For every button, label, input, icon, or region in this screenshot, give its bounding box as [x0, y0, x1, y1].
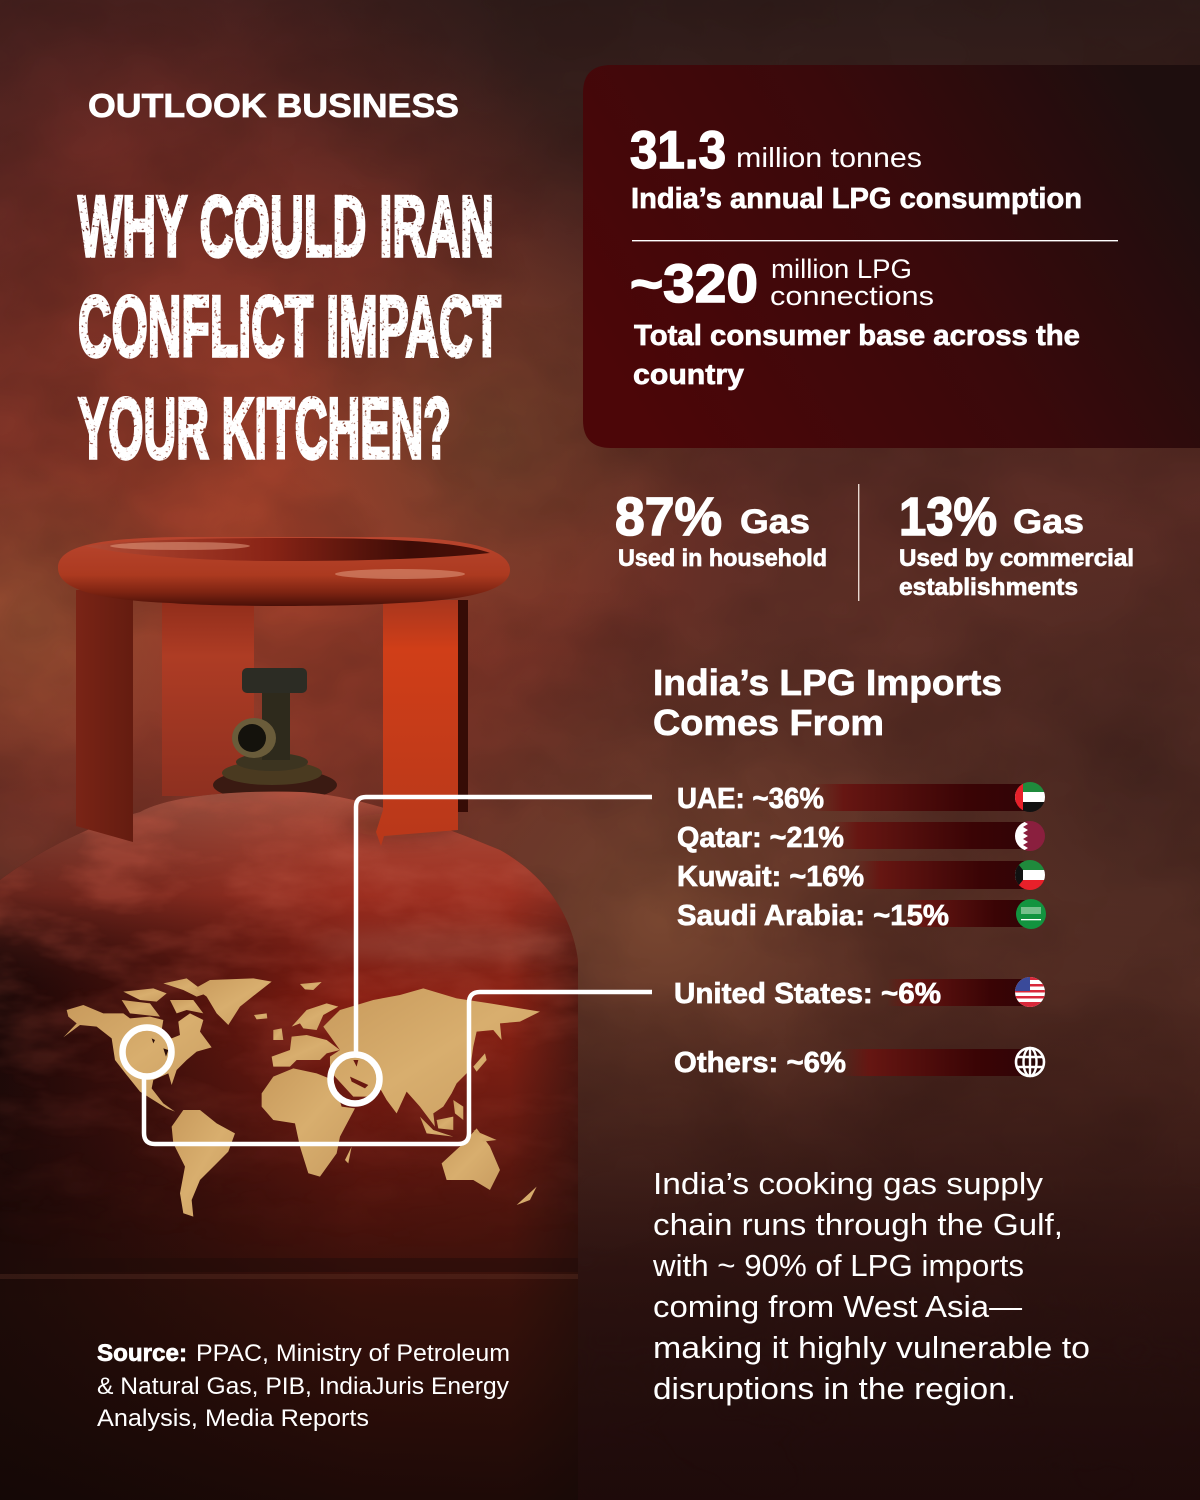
stat: household share: Used in household	[618, 545, 827, 572]
stat: connections: million LPG	[771, 254, 912, 284]
cylinder valve	[213, 668, 337, 801]
import row: Kuwait	[677, 860, 1045, 893]
summary text: coming from West Asia—	[653, 1289, 1022, 1324]
summary text: disruptions in the region.	[653, 1371, 1016, 1406]
stat: commercial share: establishments	[899, 574, 1078, 601]
stat: annual consumption: million tonnes	[736, 142, 922, 173]
world map	[63, 978, 540, 1217]
cylinder ring	[58, 537, 510, 606]
brand name: OUTLOOK BUSINESS	[88, 87, 459, 124]
stat: connections	[630, 254, 1080, 391]
icon: globe	[1016, 1048, 1044, 1076]
import row: Qatar: Qatar: ~21%	[677, 822, 844, 854]
stat: annual consumption: 31.3	[630, 121, 726, 180]
stat: household share: 87%	[615, 487, 722, 547]
summary text: making it highly vulnerable to	[653, 1330, 1090, 1365]
summary text: India’s cooking gas supply	[653, 1166, 1044, 1201]
stat: commercial share: Used by commercial	[899, 545, 1134, 572]
stat: connections: connections	[770, 281, 934, 311]
icon: Qatar flag	[1015, 821, 1045, 851]
panel: consumption stats	[583, 65, 1200, 448]
marker: North America	[122, 1028, 172, 1076]
import row: Others	[674, 1047, 1044, 1079]
gas cylinder illustration	[0, 537, 600, 1500]
imports heading	[653, 662, 1002, 743]
stat: commercial share: Gas	[1013, 503, 1084, 541]
stat: annual consumption: India’s annual LPG consumption	[631, 183, 1082, 215]
main title: CONFLICT IMPACT	[78, 279, 501, 375]
marker: West Asia	[330, 1054, 380, 1104]
connector lines and location markers	[122, 797, 652, 1144]
main title: WHY COULD IRAN	[78, 179, 494, 275]
source note: & Natural Gas, PIB, IndiaJuris Energy	[97, 1373, 509, 1400]
cylinder back leg	[162, 596, 254, 796]
main title: YOUR KITCHEN?	[78, 381, 451, 477]
stat: connections: ~320	[630, 254, 758, 314]
source note: Source:	[97, 1340, 187, 1367]
stat: commercial share: 13%	[899, 487, 997, 547]
imports heading: Comes From	[653, 702, 884, 743]
main title	[78, 179, 501, 477]
stat: connections: Total consumer base across the	[634, 320, 1080, 352]
import row: UAE: UAE: ~36%	[677, 783, 824, 815]
import row: Qatar	[677, 821, 1045, 854]
icon: Kuwait flag	[1015, 860, 1045, 890]
stat: commercial share	[899, 487, 1134, 601]
icon: Saudi flag	[1016, 899, 1046, 929]
summary text: chain runs through the Gulf,	[653, 1207, 1063, 1242]
import row: United States: United States: ~6%	[674, 978, 941, 1010]
cylinder right leg	[376, 600, 468, 846]
source note: Analysis, Media Reports	[97, 1405, 369, 1432]
import row: Others: Others: ~6%	[674, 1047, 846, 1079]
import row: Saudi Arabia: Saudi Arabia: ~15%	[677, 900, 949, 932]
summary text: with ~ 90% of LPG imports	[652, 1248, 1024, 1283]
import row: Kuwait: Kuwait: ~16%	[677, 861, 864, 893]
imports heading: India’s LPG Imports	[653, 662, 1002, 703]
import row: United States	[674, 977, 1045, 1010]
source note	[97, 1340, 510, 1432]
icon: UAE flag	[1015, 782, 1045, 812]
source note: PPAC, Ministry of Petroleum	[196, 1340, 510, 1367]
summary text	[652, 1166, 1090, 1406]
cylinder left leg	[76, 590, 133, 842]
stat: household share	[615, 487, 827, 572]
icon: US flag	[1015, 977, 1045, 1007]
stat: connections: country	[633, 359, 744, 391]
stat: annual consumption	[630, 121, 1082, 215]
cylinder body	[0, 780, 600, 1500]
import row: UAE	[677, 782, 1045, 815]
stat: household share: Gas	[740, 503, 810, 541]
